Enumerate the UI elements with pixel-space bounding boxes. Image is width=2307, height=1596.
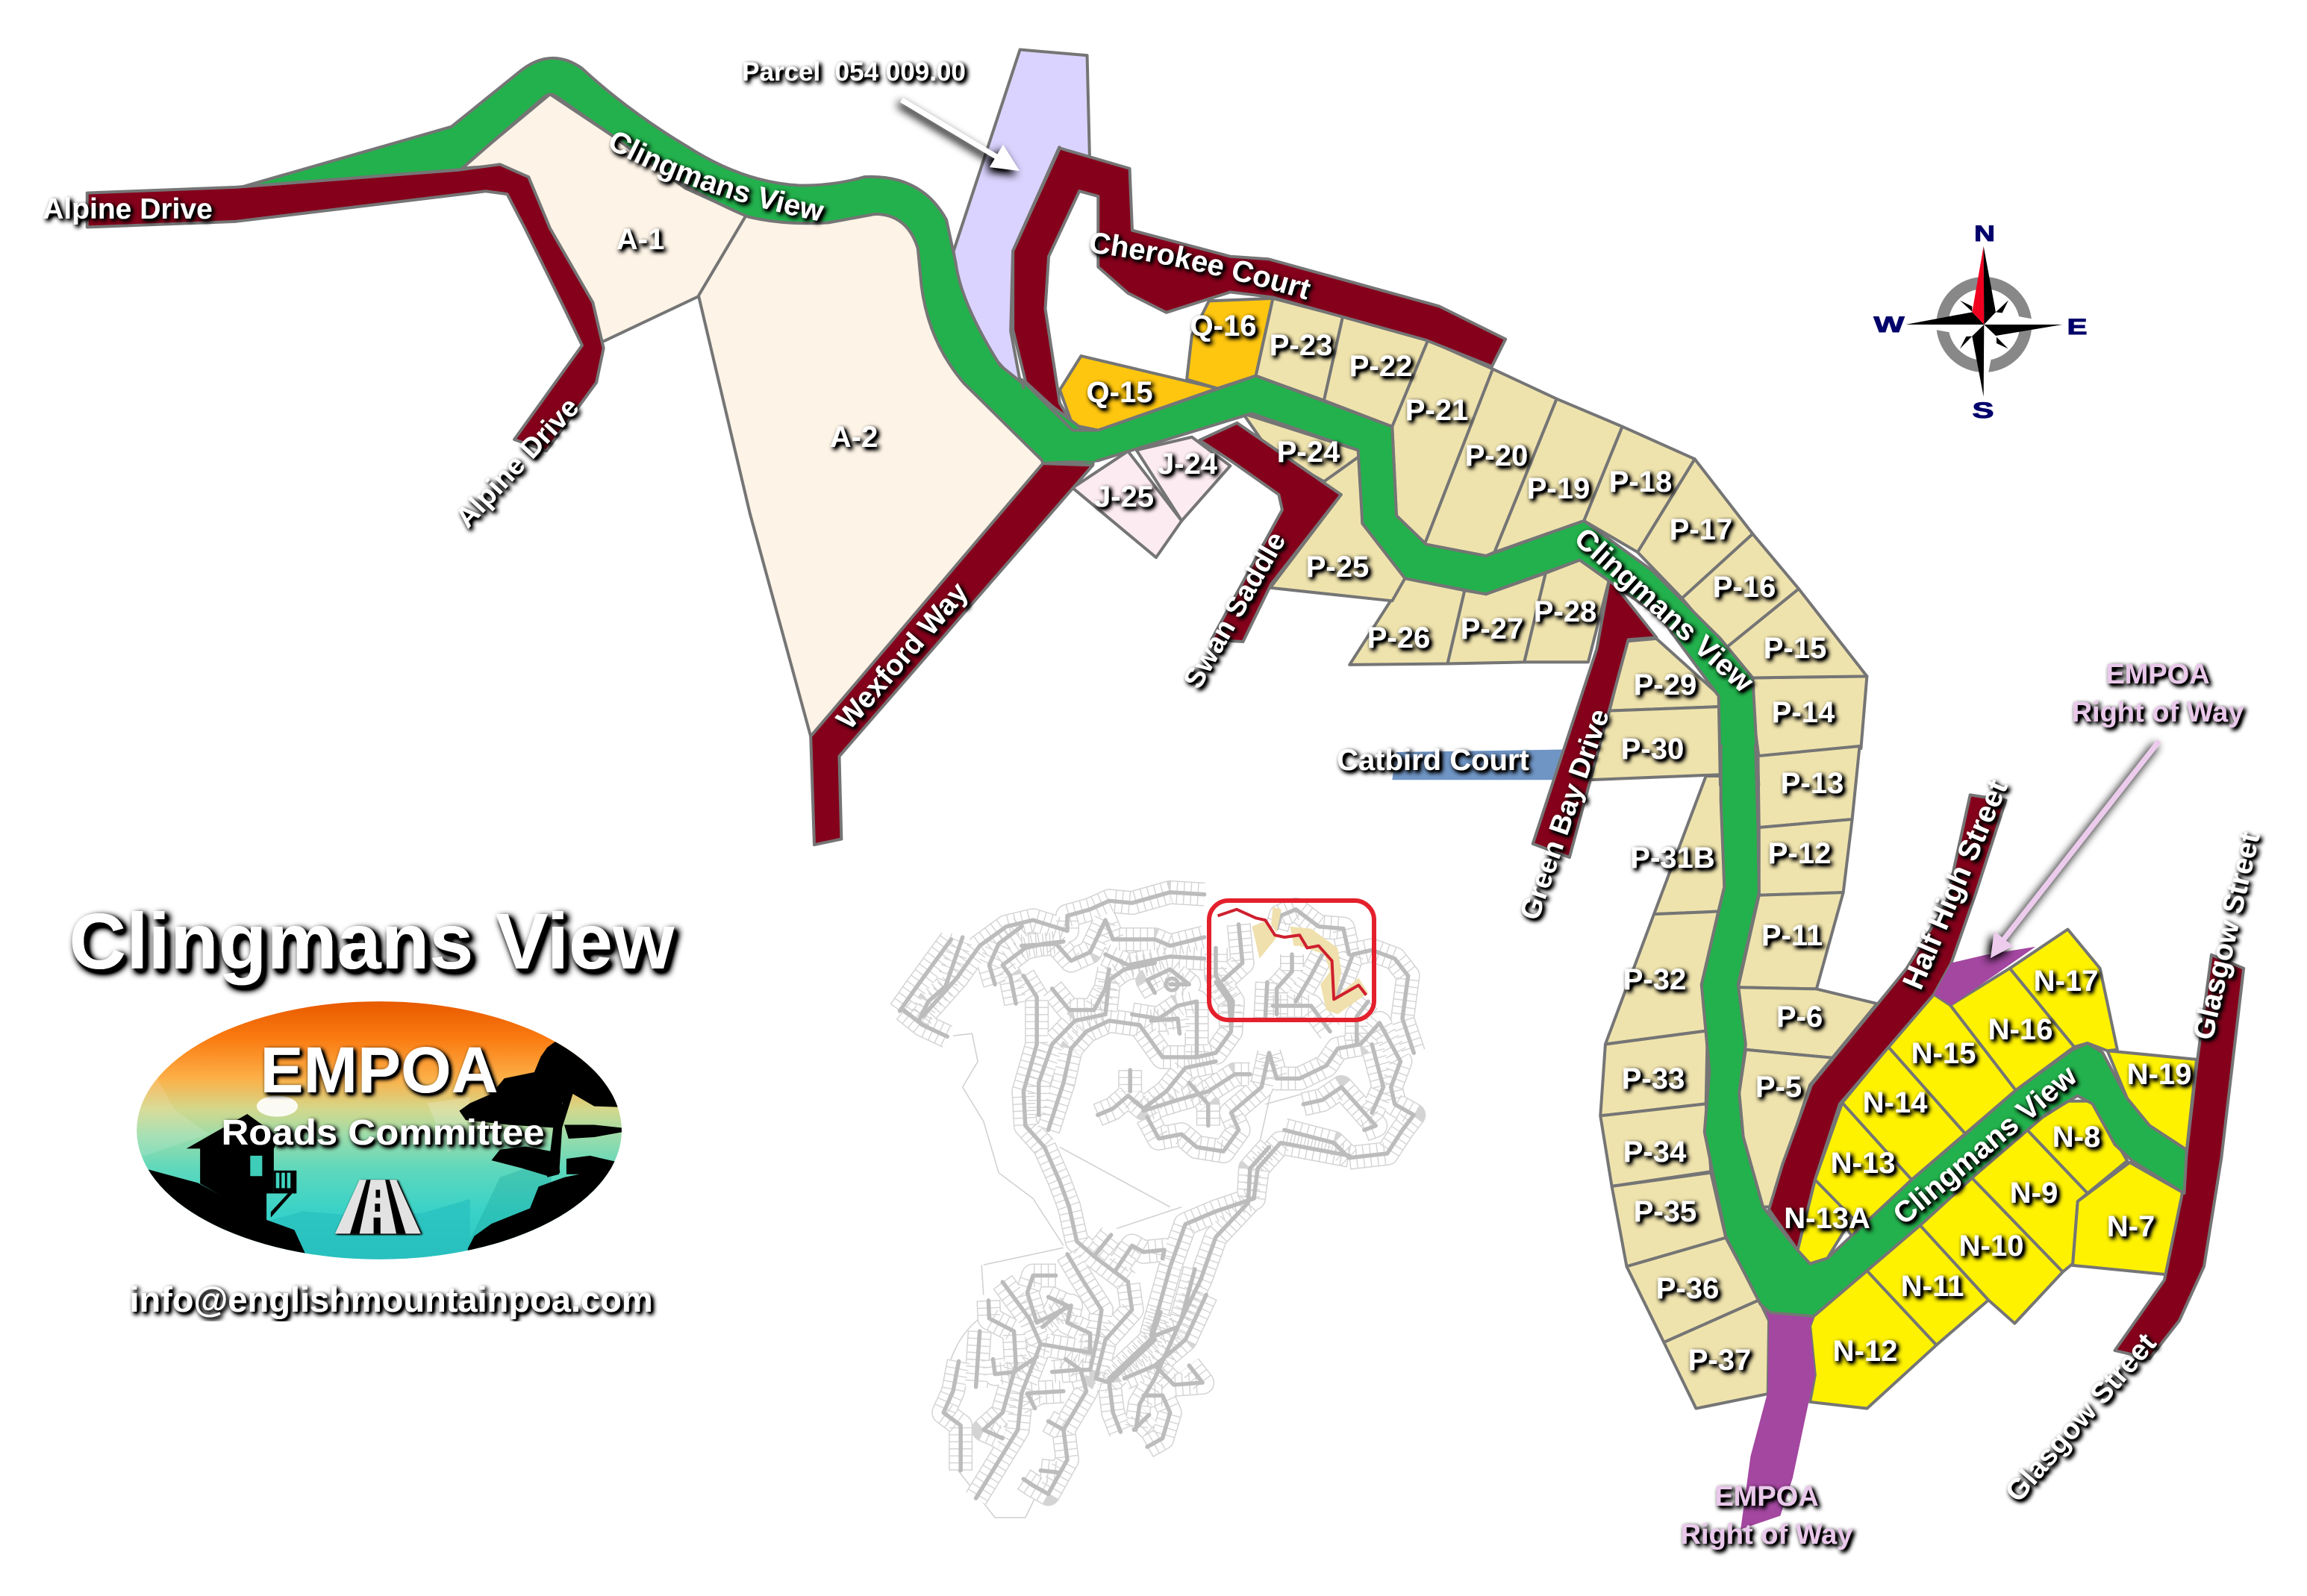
Roads Committee: Roads Committee [221,1113,545,1153]
road label: Alpine Drive horizontal: Alpine Drive [43,193,213,225]
label P-34: P-34 [1623,1136,1687,1168]
label P-17: P-17 [1670,513,1732,546]
label J-24: J-24 [1158,448,1218,481]
road label: Clingmans View south: Clingmans View [1887,1059,2084,1231]
road label: Half High Street: Half High Street [1897,775,2014,994]
label N-9: N-9 [2010,1177,2058,1209]
EMPOA: EMPOA [260,1034,499,1107]
callout: Right of Way bottom: Right of Way [1681,1519,1852,1550]
inset: red highlight box [1209,901,1374,1020]
label P-24: P-24 [1277,436,1340,469]
label P-37: P-37 [1688,1344,1751,1377]
label N-10: N-10 [1959,1230,2023,1262]
label P-28: P-28 [1534,595,1596,628]
callout: EMPOA bottom: EMPOA [1714,1481,1819,1512]
road label: Clingmans View middle: Clingmans View [1568,522,1760,699]
road label: Alpine Drive diagonal: Alpine Drive [449,392,585,534]
road label: Glasgow Street north: Glasgow Street [2188,829,2266,1042]
label A-2: A-2 [830,421,878,454]
road label: Clingmans View north: Clingmans View [608,131,830,227]
icon: road [335,1180,421,1233]
label P-29: P-29 [1634,669,1696,701]
label N-8: N-8 [2052,1121,2100,1154]
label Q-15: Q-15 [1087,376,1152,409]
compass W: W [1873,313,1905,337]
label P-15: P-15 [1764,632,1826,665]
EMPOA right of way purple segments [1741,947,2035,1530]
callout: EMPOA top: EMPOA [2105,659,2210,690]
label P-23: P-23 [1270,329,1332,362]
inset locator map [900,892,1414,1518]
label P-31B: P-31B [1630,842,1715,874]
label N-12: N-12 [1833,1335,1897,1368]
parcel label: Parcel 054 009.00 [742,57,966,87]
label P-6: P-6 [1776,1001,1823,1033]
inset: highlighted parcels [1252,907,1368,1014]
label A-1: A-1 [616,223,664,256]
parcel 054 009.00 lavender [954,50,1090,388]
label P-12: P-12 [1768,837,1831,870]
label N-16: N-16 [1988,1013,2052,1046]
label P-21: P-21 [1405,394,1468,427]
parcels south section P-5 to P-37 and N lots [1600,746,2197,1409]
label P-11: P-11 [1761,919,1823,952]
label N-19: N-19 [2127,1058,2191,1091]
label P-18: P-18 [1609,466,1672,498]
label P-25: P-25 [1306,551,1369,583]
compass S: S [1972,398,1994,423]
parcels north section P-15 to P-30, Q and J lots [1060,298,1867,780]
label P-36: P-36 [1656,1272,1719,1305]
logo: EMPOA Roads Committee [137,1001,622,1259]
label J-25: J-25 [1094,481,1154,513]
label P-16: P-16 [1713,571,1776,604]
contact email: info@englishmountainpoa.com [129,1280,653,1319]
maroon roads: Half High Street, Glasgow Street [1769,795,2244,1359]
callout: Right of Way top: Right of Way [2072,697,2244,728]
label P-22: P-22 [1349,350,1412,383]
road label: Swan Saddle: Swan Saddle [1178,527,1293,694]
label N-7: N-7 [2107,1210,2155,1243]
road label: Glasgow Street south: Glasgow Street [1999,1327,2162,1508]
label P-26: P-26 [1367,622,1430,654]
road label: Cherokee Court: Cherokee Court [1088,231,1316,305]
road: Clingmans View green [243,58,2187,1316]
label P-33: P-33 [1622,1063,1685,1095]
label P-5: P-5 [1755,1071,1802,1104]
road label: Catbird Court: Catbird Court [1337,744,1529,777]
road label: Green Bay Drive: Green Bay Drive [1514,705,1616,924]
road: Catbird Court [1392,750,1563,780]
label P-19: P-19 [1527,472,1590,505]
compass rose [1873,222,2087,423]
title: Clingmans View [69,898,675,986]
logo text [221,1034,545,1153]
maroon roads: Cherokee Court, Swan Saddle, Green Bay Drive [1013,148,1656,857]
label P-13: P-13 [1781,767,1844,800]
label P-32: P-32 [1623,963,1686,996]
arrow: EMPOA right of way pointer [1991,741,2159,958]
label P-20: P-20 [1465,439,1528,472]
label P-35: P-35 [1634,1195,1696,1228]
arrow: parcel pointer [902,100,1020,171]
road label: Wexford Way: Wexford Way [831,576,975,735]
label P-14: P-14 [1772,696,1835,729]
parcels A-1 and A-2 [461,94,1046,736]
label N-11: N-11 [1901,1270,1964,1303]
label P-27: P-27 [1461,613,1523,645]
label N-15: N-15 [1911,1037,1976,1070]
label Q-16: Q-16 [1190,310,1256,342]
label P-30: P-30 [1621,733,1684,766]
inset: Clingmans View route [1218,910,1367,999]
label N-14: N-14 [1863,1086,1928,1119]
maroon roads: Alpine Drive and Wexford Way [87,164,1093,845]
label N-17: N-17 [2034,965,2098,998]
label N-13A: N-13A [1784,1202,1870,1235]
compass N: N [1974,222,1995,246]
compass E: E [2067,315,2087,339]
label N-13: N-13 [1831,1147,1895,1180]
